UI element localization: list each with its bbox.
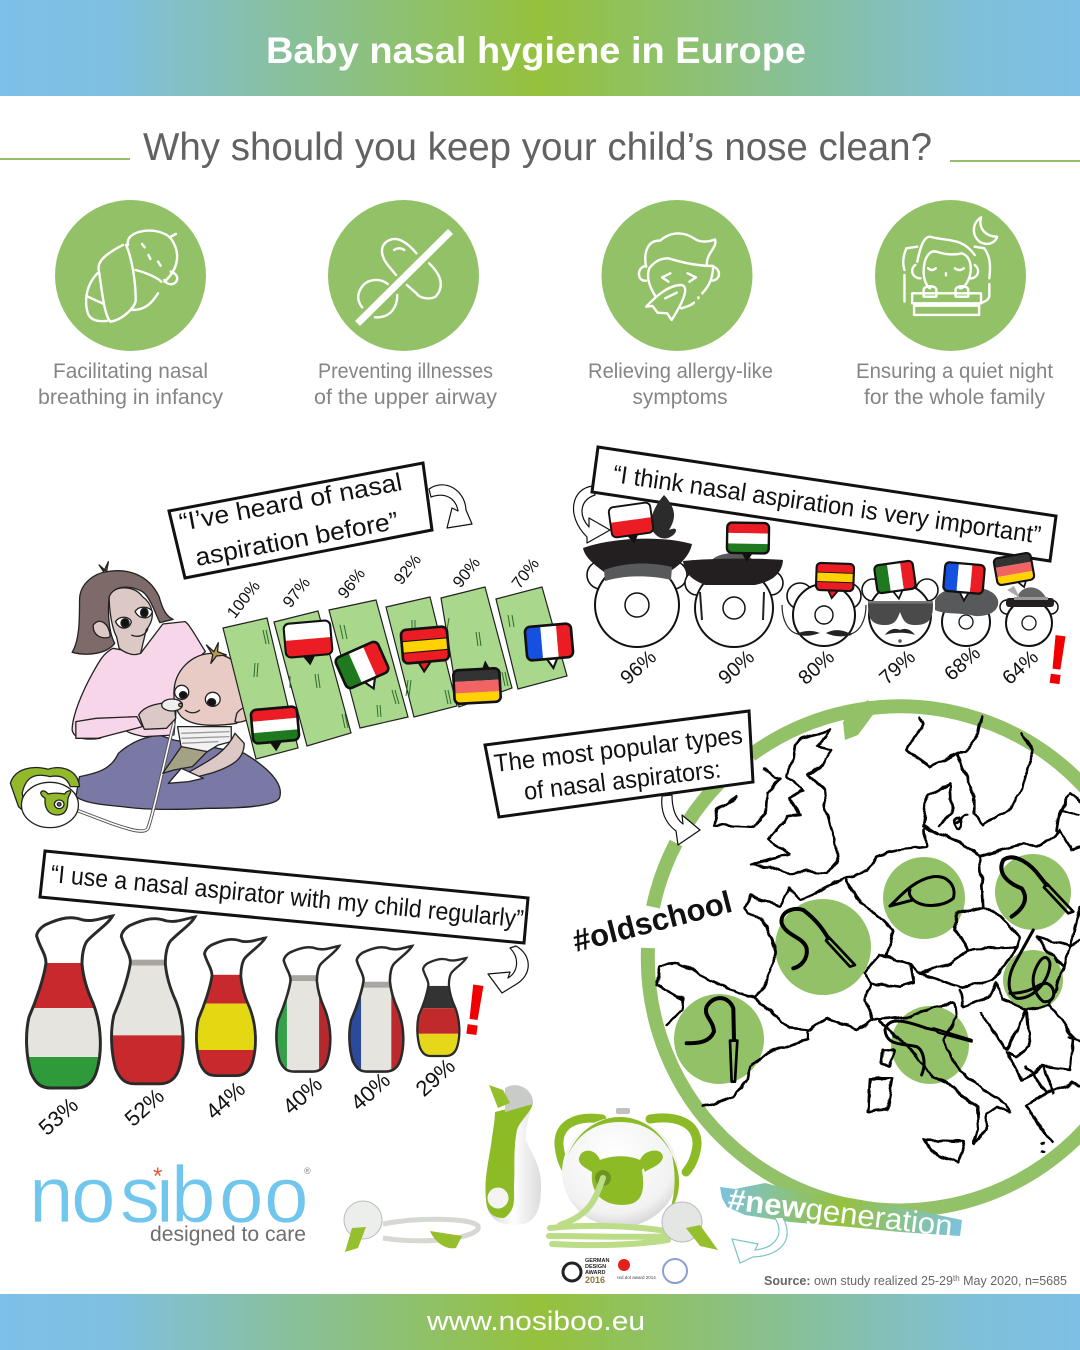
mother's smile: [131, 628, 148, 636]
hashtag: new generation: #newgeneration: [726, 1183, 954, 1243]
bottle Hungary 53%: [21, 916, 121, 1092]
logo: nosiboo: nosiboo: [29, 1150, 308, 1239]
mother's sweater: [72, 622, 205, 739]
head percentage labels: 68%: [940, 642, 985, 685]
caption line 2: of the upper airway: [314, 386, 498, 409]
flag France: [525, 623, 574, 670]
arrow: banner to bars: [429, 485, 472, 528]
logo: tagline: designed to care: [150, 1223, 306, 1246]
mother's arm: [76, 717, 142, 738]
bar Poland 97%: [274, 611, 351, 746]
benefit: allergy relief: [588, 200, 773, 383]
banner: heard of nasal aspiration: “I’ve heard of nasal: [177, 468, 404, 537]
bar Spain 92%: [386, 597, 457, 717]
header banner: [0, 0, 1080, 96]
banner: heard of nasal aspiration: aspiration before”: [193, 507, 401, 572]
mother's hair: [72, 562, 173, 654]
bottle percentage labels: 40%: [346, 1067, 395, 1115]
head Italy 79%: [862, 579, 938, 646]
red exclamation mark: !: [457, 969, 492, 1052]
flag Poland: [608, 502, 655, 546]
bar percentage labels: 97%: [280, 574, 314, 611]
arrow: new generation to product: [732, 1218, 787, 1263]
pump top button: [616, 1108, 630, 1114]
hand aspirator: [485, 1085, 541, 1225]
benefit: nasal breathing: [53, 200, 208, 383]
illustration: mother and baby with aspirator: [10, 562, 280, 831]
device green badge: [41, 791, 71, 815]
bar France 70%: [496, 587, 567, 689]
source note: th: [953, 1274, 960, 1283]
bottle percentage labels: 44%: [201, 1076, 250, 1124]
bottle percentage labels: 53%: [34, 1092, 83, 1140]
banner: heard of nasal aspiration: [169, 463, 432, 578]
bar percentage labels: 90%: [450, 554, 484, 591]
pump hose: [549, 1178, 675, 1245]
bottle percentage labels: 40%: [278, 1071, 327, 1119]
chart: character heads sized by percentage: [583, 495, 1074, 700]
german design award: [563, 1258, 609, 1285]
mother's hand: [139, 703, 176, 729]
flag Italy: [874, 560, 917, 601]
baby's head: [174, 653, 250, 725]
brush blob on ring: [843, 700, 875, 740]
awards row: [563, 1258, 687, 1285]
bottle Poland 52%: [106, 917, 203, 1088]
bar percentage labels: 100%: [224, 577, 264, 622]
arrow: types banner to map: [662, 795, 700, 845]
tube aspirator Spain: [687, 998, 734, 1043]
german design award: 2016: [585, 1275, 605, 1285]
mother's jeans: [76, 735, 280, 809]
bar percentage labels: 96%: [335, 565, 369, 602]
red exclamation mark: !: [1041, 620, 1074, 700]
pump green badge: [579, 1151, 651, 1205]
winner seal: [663, 1259, 687, 1283]
bulb aspirator Germany: [890, 876, 954, 906]
baby's mouth: [185, 710, 200, 713]
bar Italy 96%: [329, 600, 408, 728]
logo: registered mark: ®: [304, 1166, 311, 1176]
europe map outline: [657, 717, 1080, 1163]
flag Hungary: [727, 522, 769, 562]
hashtag: oldschool: #oldschool: [569, 884, 736, 959]
bar percentage labels: 70%: [509, 555, 543, 592]
flag Hungary: [251, 706, 300, 753]
head France 68%: [935, 588, 998, 646]
baby's hair tuft: [206, 643, 226, 663]
title: Baby nasal hygiene in Europe: [266, 30, 806, 71]
caption line 2: for the whole family: [864, 386, 1045, 409]
bottle percentage labels: 52%: [120, 1083, 169, 1131]
tube: [63, 723, 174, 831]
bar percentage labels: 92%: [391, 551, 425, 588]
flag Italy: [334, 640, 394, 698]
german design award: AWARD: [585, 1270, 606, 1276]
pump handles: [559, 1118, 697, 1172]
tangled tube aspirator Hungary: [1009, 930, 1054, 1002]
baby's eyes: [175, 685, 189, 699]
aspirator nozzle: [162, 699, 182, 711]
icon: swaddled baby: [86, 231, 177, 322]
flag Germany: [993, 552, 1036, 592]
device handles: [10, 768, 80, 813]
banner: use aspirator regularly: “I use a nasal aspirator with my child regularly”: [49, 860, 525, 933]
aspirator icons: [687, 857, 1073, 1082]
tube aspirator France: [782, 909, 828, 968]
mother's supporting arm: [185, 733, 244, 780]
arrow: regular use banner to bottles: [488, 946, 528, 993]
logo: i-dot cover: [157, 1160, 173, 1172]
bottle Italy 40%: [272, 946, 345, 1074]
caption line 2: symptoms: [632, 386, 728, 409]
footer banner: [0, 1294, 1080, 1350]
benefit: preventing illness: [318, 200, 493, 383]
bottle France 40%: [345, 946, 418, 1074]
mother's eyes: [115, 617, 131, 628]
mother's ear: [93, 621, 110, 638]
head percentage labels: 96%: [616, 646, 661, 689]
pump body: [562, 1117, 678, 1227]
section heading: Why should you keep your child’s nose clean?: [143, 126, 932, 169]
bar Germany 90%: [441, 587, 512, 707]
caption: Ensuring a quiet night: [856, 360, 1053, 383]
head percentage labels: 79%: [875, 646, 920, 689]
icon: slash: [355, 229, 453, 326]
right tip assembly: [662, 1202, 718, 1250]
caption: Preventing illnesses: [318, 360, 493, 383]
map panel: ring and europe: [648, 700, 1080, 1210]
chart: heard of aspiration bars: [223, 551, 574, 759]
tube aspirator Poland: [1001, 857, 1047, 917]
pump body green rim: [568, 1117, 679, 1215]
baby's foot: [168, 768, 204, 783]
head percentage labels: 90%: [714, 646, 759, 689]
baby's ear: [235, 707, 252, 722]
peacock feather: [651, 495, 676, 538]
icon: crossed-out nose: [358, 239, 441, 317]
caption line 2: breathing in infancy: [38, 386, 224, 409]
bottle percentage labels: [34, 1053, 460, 1140]
tube aspirator Italy: [885, 1021, 935, 1075]
arrow: importance banner to heads: [574, 486, 610, 543]
bottle Spain 44%: [192, 938, 272, 1079]
website url: www.nosiboo.eu: [426, 1306, 645, 1336]
bar percentage labels: [224, 551, 543, 622]
head Hungary 90%: [683, 553, 783, 647]
chart: penguin bottles: [21, 916, 492, 1140]
grass marks: [254, 615, 514, 728]
device body: [21, 782, 78, 828]
source note: May 2020, n=5685: [960, 1274, 1067, 1288]
bottle Germany 29%: [414, 958, 471, 1058]
source note: Source: own study realized 25-29: [764, 1274, 953, 1288]
head Poland 96%: [583, 495, 692, 647]
mother's neck and face: [109, 588, 152, 655]
head Spain 80%: [782, 583, 866, 646]
flag Poland: [283, 620, 334, 667]
flag France: [942, 562, 985, 602]
baby's shirt stripes: [181, 732, 229, 743]
baby's pants: [163, 747, 207, 773]
green ring: [648, 706, 1080, 1210]
red dot award: red dot award 2014: [617, 1275, 656, 1280]
icon: sleeping child and moon: [903, 217, 997, 315]
flag Germany: [453, 660, 501, 704]
benefit: quiet night: [856, 200, 1053, 383]
german design award: GERMAN: [585, 1258, 609, 1264]
product photo: nosiboo devices: [344, 1085, 718, 1252]
caption: Facilitating nasal: [53, 360, 208, 383]
banner: aspiration is very important: “I think nasal aspiration is very important”: [611, 460, 1043, 550]
flag Spain: [401, 626, 450, 673]
country bubbles: [674, 854, 1071, 1084]
caption: Relieving allergy-like: [588, 360, 773, 383]
head percentage labels: 80%: [794, 646, 839, 689]
left tube with tips: [344, 1201, 478, 1252]
banner: most popular types: The most popular types: [492, 721, 744, 778]
head percentage labels: [616, 642, 1043, 689]
icon: sneezing face: [639, 233, 719, 320]
head Germany 64%: [1000, 586, 1058, 646]
baby's shirt: [178, 727, 231, 752]
banner: most popular types: [485, 711, 753, 817]
german design award: DESIGN: [585, 1264, 606, 1270]
bottle percentage labels: 29%: [411, 1053, 460, 1101]
logo: red star: *: [153, 1163, 162, 1190]
flag Spain: [816, 563, 854, 599]
bar Hungary 100%: [223, 618, 298, 759]
head percentage labels: 64%: [998, 646, 1043, 689]
banner: most popular types: of nasal aspirators:: [522, 755, 722, 806]
